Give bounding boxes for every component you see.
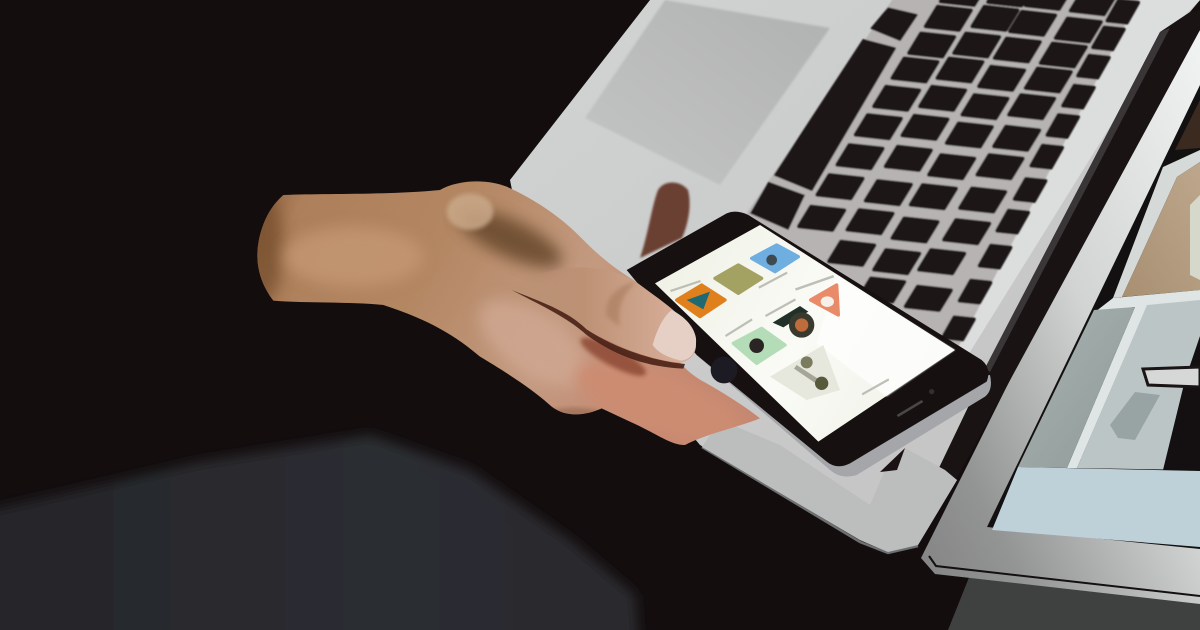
display: white frame bbox=[1113, 150, 1200, 298]
app icon: dark badge bbox=[773, 306, 808, 327]
coral icon dot bbox=[821, 296, 834, 307]
finger behind phone bbox=[640, 182, 690, 258]
display: faucet block bbox=[1143, 367, 1200, 387]
display: upper dark photo bbox=[1175, 100, 1200, 150]
laptop lid bbox=[921, 30, 1200, 604]
speaker strip bbox=[943, 0, 1200, 360]
thumb crease shadow bbox=[512, 290, 685, 369]
display: dark strip bbox=[1163, 336, 1200, 471]
earpiece bbox=[897, 400, 923, 417]
camera dot bbox=[929, 389, 934, 394]
display: basin shape bbox=[1110, 392, 1160, 440]
keyboard bottom corner key bbox=[750, 182, 805, 230]
base lower edge bbox=[702, 447, 918, 553]
orange icon arrow bbox=[687, 292, 710, 309]
lid rim line bbox=[929, 556, 1200, 596]
trackpad bbox=[585, 0, 830, 185]
knuckle shadow bbox=[454, 204, 570, 275]
phone silver edge bbox=[698, 357, 991, 477]
palm highlight bbox=[476, 297, 584, 387]
blue icon figure bbox=[766, 255, 777, 265]
hand and wrist base bbox=[257, 181, 760, 445]
hand shading clipped to the outline bbox=[258, 192, 744, 445]
knuckle highlight bbox=[447, 193, 493, 230]
app icon: green bbox=[733, 328, 785, 363]
jeans on lower left bbox=[0, 435, 640, 630]
keyboard bbox=[747, 0, 1142, 350]
hand bbox=[243, 181, 760, 462]
app icon: round seal bbox=[789, 312, 814, 338]
thumb bbox=[507, 268, 696, 363]
base area under phone bbox=[702, 420, 957, 552]
wrist left shadow bbox=[258, 200, 290, 300]
thumb knuckle shadow bbox=[606, 282, 637, 327]
display: bathroom picture bbox=[1077, 300, 1200, 470]
notch at base bbox=[880, 448, 905, 472]
key above space bar bbox=[872, 8, 917, 40]
space bar bbox=[775, 40, 895, 190]
screen glare bbox=[817, 277, 955, 397]
display: grey picture bbox=[1018, 307, 1135, 468]
display: wood picture bbox=[1122, 162, 1200, 297]
round seal inner bbox=[795, 318, 808, 332]
app icon: food bbox=[715, 265, 762, 293]
app icon: coral bbox=[811, 285, 838, 315]
app icon: orange bbox=[677, 285, 725, 317]
lower finger flush bbox=[574, 364, 744, 445]
phone screen bbox=[655, 225, 955, 442]
laptop base bbox=[510, 0, 1200, 553]
large illustration bbox=[770, 345, 840, 400]
thumb nail bbox=[653, 310, 696, 361]
app icon: partial dark circle bbox=[711, 357, 737, 383]
lower palm edge shadow bbox=[554, 406, 598, 414]
reddish fold shadow bbox=[578, 335, 648, 378]
display: pale panel on wood bbox=[1190, 195, 1200, 280]
hinge band bbox=[937, 10, 1200, 478]
wrist highlight bbox=[283, 227, 423, 287]
key rows bbox=[799, 0, 1138, 339]
green icon target bbox=[749, 338, 764, 353]
display: horizontal frame bbox=[1067, 290, 1200, 468]
laptop display bbox=[987, 85, 1200, 549]
app icon: blue bbox=[752, 245, 798, 272]
phone bbox=[627, 212, 991, 477]
phone black body bbox=[627, 212, 988, 466]
display: light blue lower band bbox=[992, 467, 1200, 547]
listing text lines bbox=[670, 272, 889, 395]
table surface lower right bbox=[948, 575, 1200, 630]
